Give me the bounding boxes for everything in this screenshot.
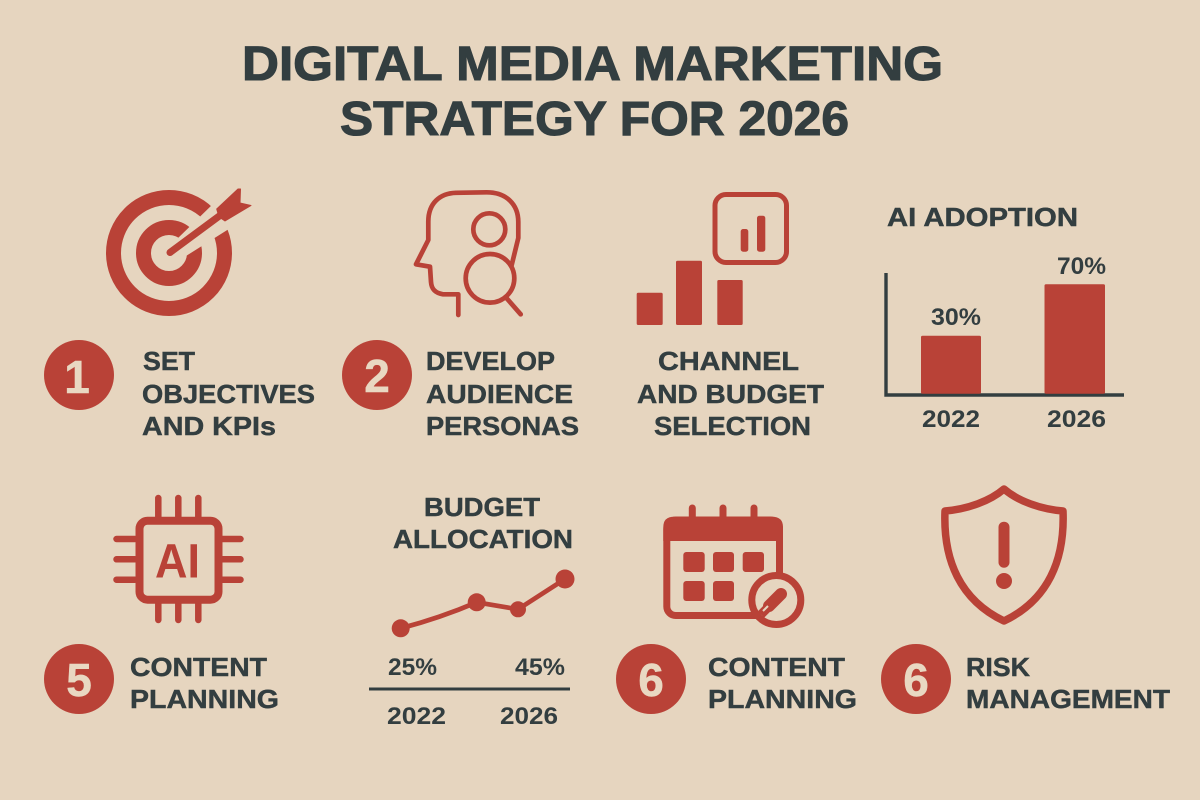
icon: AI chip [116, 498, 240, 620]
label: content planning: PLANNING [708, 684, 857, 714]
title [242, 38, 943, 146]
label: content planning [708, 652, 857, 714]
panel: content planning with calendar [616, 508, 857, 714]
panel: AI adoption chart [886, 202, 1124, 433]
values and years: 45% [515, 654, 565, 681]
badge: number 5 [44, 644, 114, 714]
label: develop audience personas: AUDIENCE [426, 379, 573, 409]
heading: AI adoption: AI ADOPTION [887, 202, 1078, 232]
heading: budget allocation: BUDGET [424, 492, 540, 522]
chart axes [886, 273, 1124, 395]
badge: number 1: 1 [64, 351, 90, 403]
badge: number 6: 6 [903, 654, 929, 706]
icon: head with magnifier [416, 192, 521, 315]
label: set objectives and KPIs: SET [143, 346, 195, 376]
label: set objectives and KPIs [142, 346, 315, 441]
label: risk management: MANAGEMENT [966, 684, 1170, 714]
values and years [369, 654, 570, 730]
label: risk management: RISK [966, 652, 1030, 682]
panel: channel and budget selection [637, 194, 824, 441]
bar: 2022 30%: 30% [931, 304, 981, 331]
panel: develop audience personas [342, 192, 579, 441]
bar: 2026 70%: 70% [1057, 253, 1106, 280]
label: content planning: CONTENT [708, 652, 845, 682]
label: risk management [966, 652, 1170, 714]
label: channel and budget selection: AND BUDGET [637, 379, 824, 409]
badge: number 5: 5 [66, 654, 92, 706]
panel: risk management [881, 489, 1170, 714]
badge: number 6: 6 [638, 654, 664, 706]
badge: number 2 [342, 340, 412, 410]
label: set objectives and KPIs: OBJECTIVES [142, 379, 315, 409]
values and years: 2026 [500, 703, 558, 730]
label: develop audience personas: PERSONAS [426, 411, 579, 441]
label: channel and budget selection [637, 346, 824, 441]
badge: number 2: 2 [364, 350, 390, 402]
label: content planning: PLANNING [130, 684, 279, 714]
line chart [392, 570, 574, 637]
label: channel and budget selection: SELECTION [654, 411, 811, 441]
panel: set objectives and KPIs [44, 189, 315, 441]
values and years: 2022 [387, 703, 446, 730]
panel: content planning with AI [44, 498, 279, 714]
bar: 2026 70%: 2026 [1047, 406, 1106, 433]
icon: shield with exclamation mark [945, 489, 1063, 621]
icon: target with arrow [114, 189, 251, 308]
label: content planning [130, 652, 279, 714]
badge: number 6 [881, 644, 951, 714]
title: DIGITAL MEDIA MARKETING [242, 38, 943, 91]
panel: budget allocation chart [369, 492, 574, 730]
label: set objectives and KPIs: AND KPIs [142, 411, 276, 441]
icon: AI chip: AI [155, 536, 200, 588]
heading: budget allocation [393, 492, 573, 554]
bar: 2022 30% [921, 304, 981, 433]
label: channel and budget selection: CHANNEL [658, 346, 799, 376]
label: develop audience personas: DEVELOP [426, 346, 555, 376]
icon: calendar with pencil badge [663, 508, 801, 624]
label: content planning: CONTENT [130, 652, 267, 682]
heading: budget allocation: ALLOCATION [393, 524, 573, 554]
values and years: 25% [388, 654, 437, 681]
icon: bar chart with framed chart [637, 194, 786, 325]
bar: 2026 70% [1044, 253, 1106, 433]
badge: number 6 [616, 644, 686, 714]
label: develop audience personas [426, 346, 579, 441]
badge: number 1 [44, 340, 114, 410]
title: STRATEGY FOR 2026 [340, 93, 849, 146]
bar: 2022 30%: 2022 [922, 406, 980, 433]
